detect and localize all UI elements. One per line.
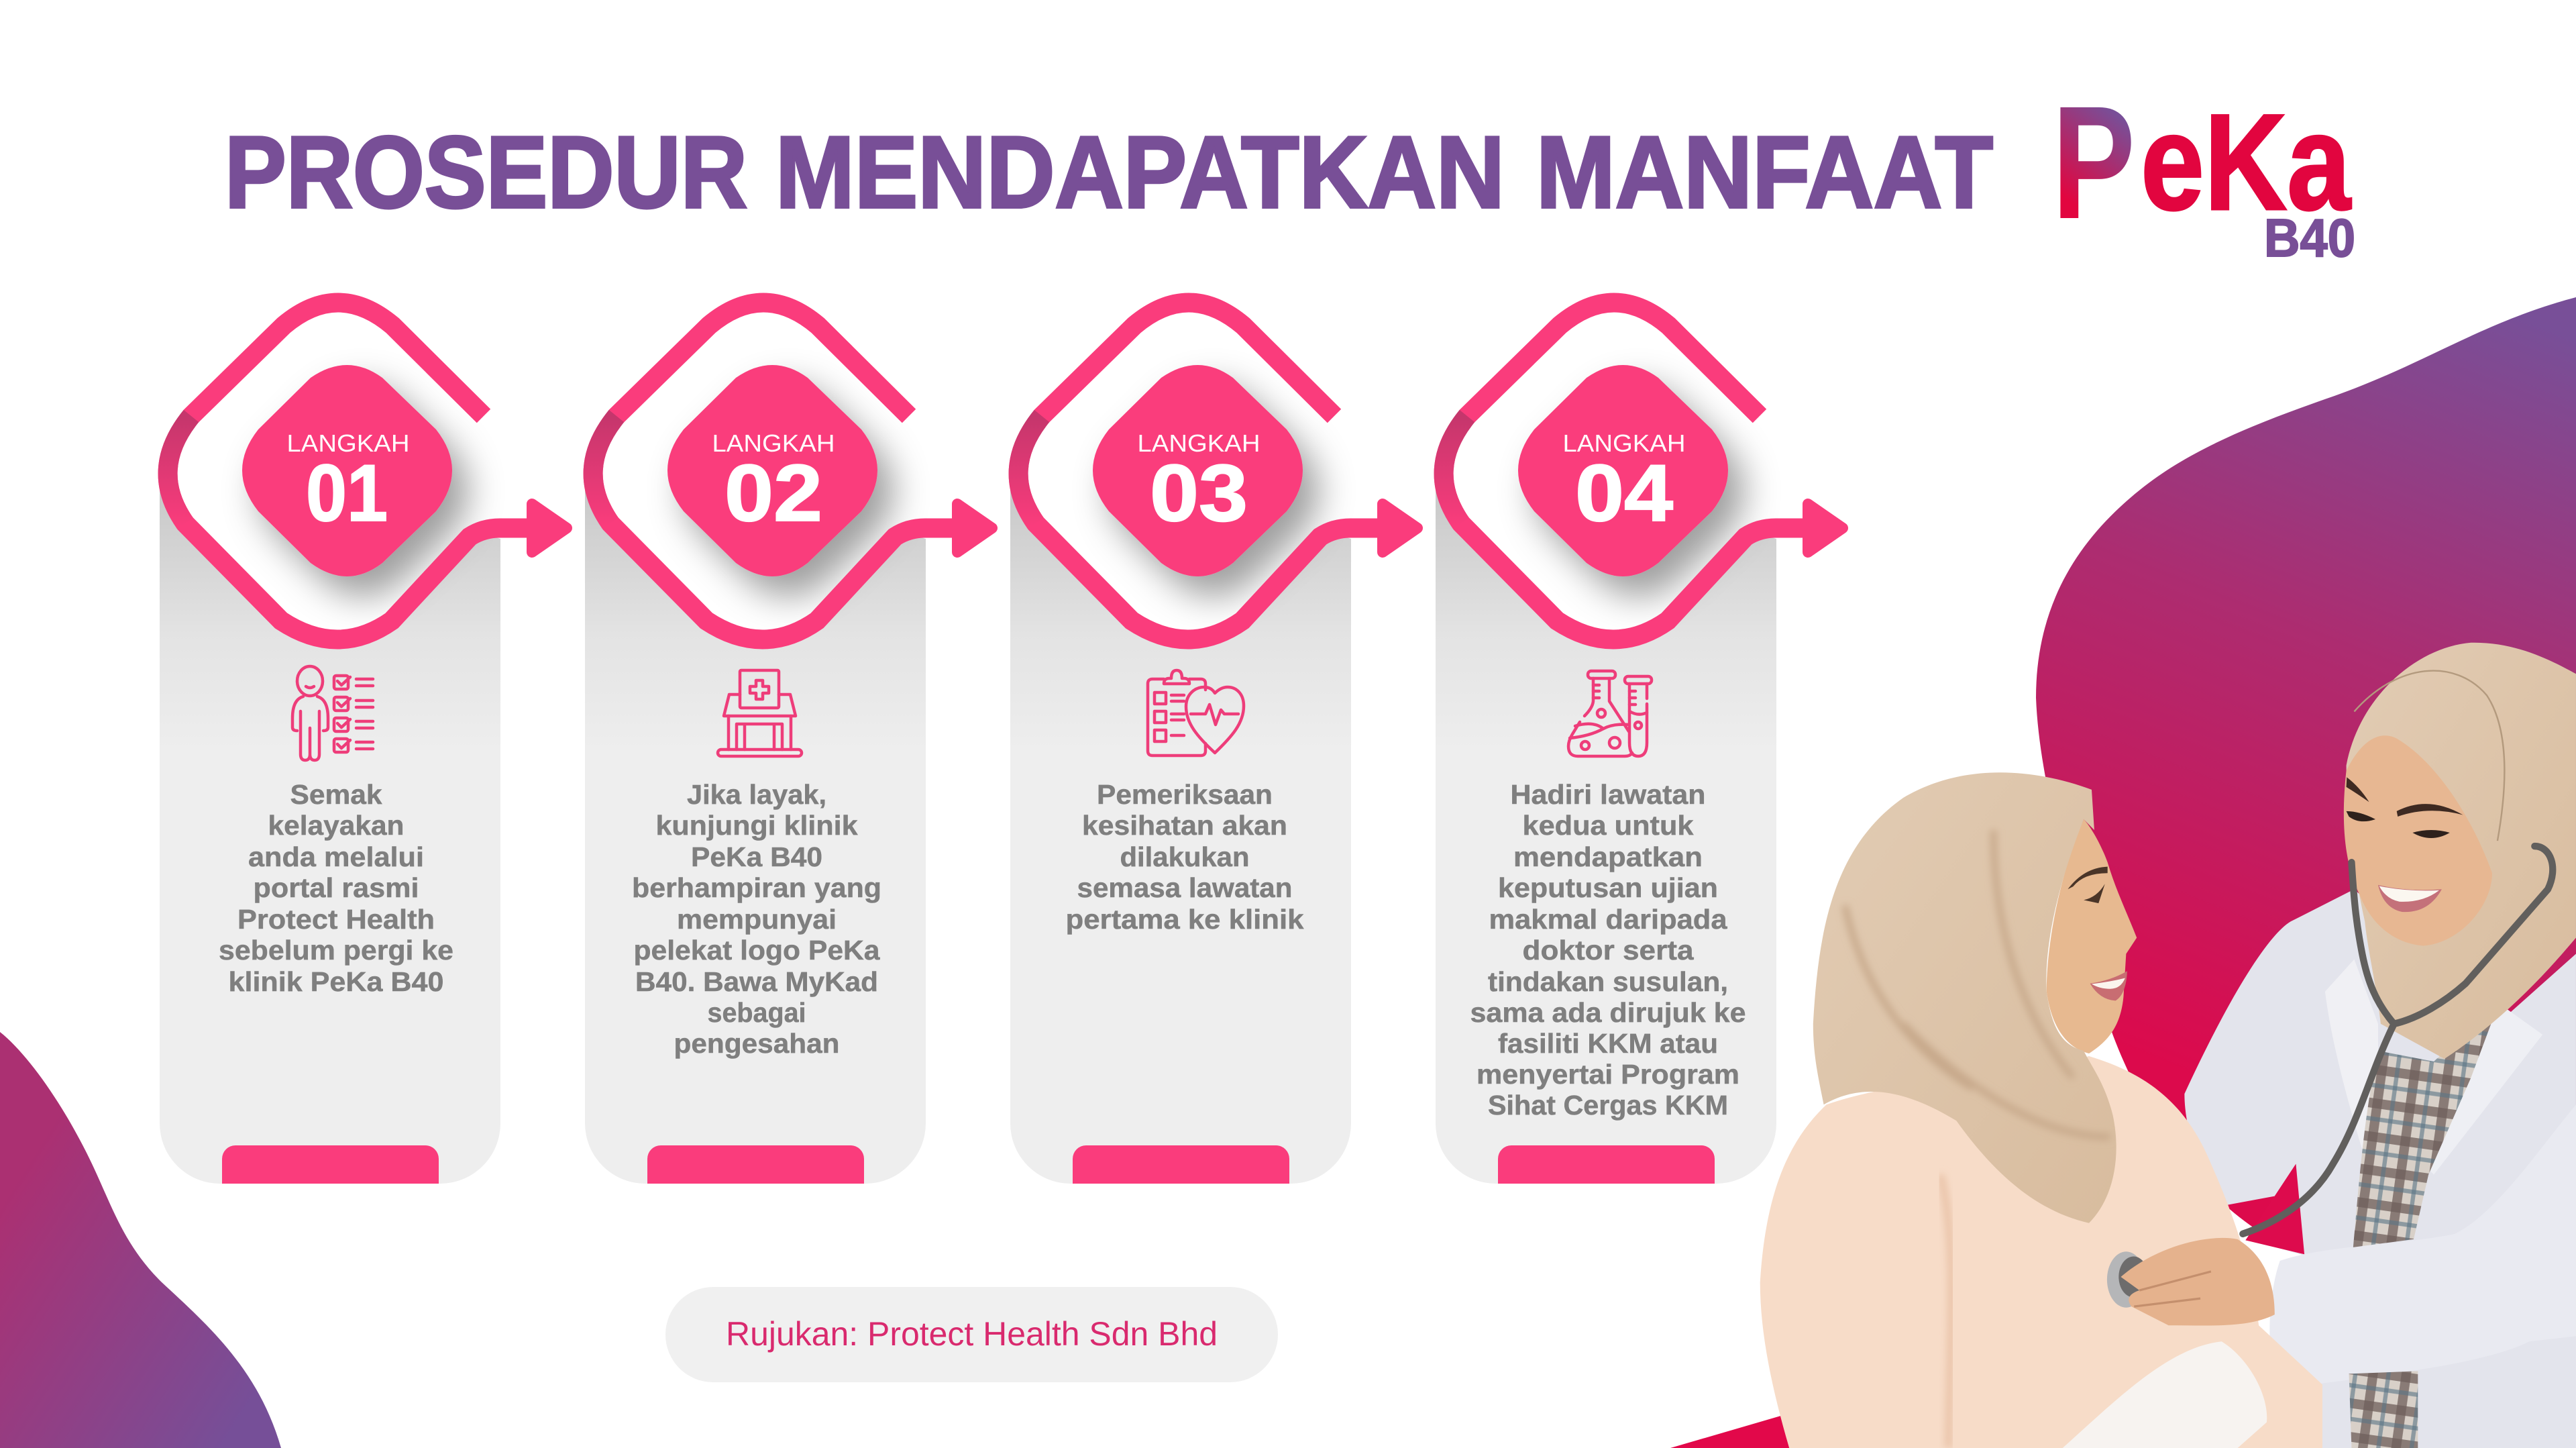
step 04 description: sama ada dirujuk ke [1470,997,1746,1028]
title [225,115,1993,229]
logo: PeKa B40: P [2052,72,2135,252]
step 02 badge label [712,429,835,538]
step 04 description: tindakan susulan, [1488,966,1728,997]
background blob: bottom left [0,1032,281,1448]
step 03 description [1065,779,1304,935]
step 04 badge label: LANGKAH [1563,429,1685,457]
icon: lab flask and test tube [1568,671,1652,756]
logo: PeKa B40: eKa [2141,86,2351,239]
step 03 description: pertama ke klinik [1065,904,1304,935]
photo: doctor and patient illustration [1760,643,2576,1448]
step 01 description: Protect Health [237,904,435,935]
step 01 description [219,779,453,997]
step 04 description: kedua untuk [1523,810,1694,841]
step 02 description: berhampiran yang [632,872,881,903]
step 04 description [1470,779,1746,1121]
step 03 description: dilakukan [1120,841,1249,872]
step 02 description: mempunyai [677,904,837,935]
title: PROSEDUR [225,115,747,229]
step 01 badge label [287,429,409,538]
step 04 badge label [1563,429,1685,538]
step 03 description: kesihatan akan [1082,810,1287,841]
reference pill [665,1287,1278,1382]
step 02 description [632,779,881,1059]
icon: person with checklist [292,666,373,760]
step 02 badge label: LANGKAH [712,429,835,457]
step 04 description: doktor serta [1523,935,1695,966]
icon: clinic building [718,670,802,756]
step 01 badge label: LANGKAH [287,429,409,457]
step 03 description: semasa lawatan [1077,872,1292,903]
patient [1760,772,2322,1448]
step 01 description: sebelum pergi ke [219,935,453,966]
step 02 description: pengesahan [674,1028,840,1059]
step 01 description: kelayakan [268,810,404,841]
panel: step 02 [585,303,992,1184]
step 03 badge label: LANGKAH [1138,429,1260,457]
reference pill: Rujukan: Protect Health Sdn Bhd [726,1315,1218,1353]
step 04 badge label: 04 [1575,448,1673,538]
step 03 badge label: 03 [1150,448,1248,538]
logo: PeKa B40 [2052,72,2355,268]
step 02 description: PeKa B40 [691,841,822,872]
hand with stethoscope [2107,1238,2275,1326]
step 04 description: Hadiri lawatan [1511,779,1705,810]
doctor [2184,643,2576,1448]
icon: clipboard with heart [1148,670,1244,756]
step 01 description: anda melalui [248,841,424,872]
panel: step 04 [1436,303,1843,1184]
step 02 description: Jika layak, [687,779,826,810]
panel: step 03 [1010,303,1417,1184]
step 02 badge label: 02 [724,448,822,538]
step 04 description: mendapatkan [1513,841,1703,872]
background blob: right [2036,297,2576,1275]
title: MENDAPATKAN [775,115,1505,229]
step 02 description: sebagai [707,997,806,1028]
step 04 description: menyertai Program [1477,1059,1739,1090]
step 03 badge label [1138,429,1260,538]
step 02 description: kunjungi klinik [656,810,858,841]
title: MANFAAT [1536,115,1993,229]
step 01 badge label: 01 [306,448,388,538]
step 04 description: fasiliti KKM atau [1498,1028,1718,1059]
panel: step 01 [160,303,567,1184]
step 03 description: Pemeriksaan [1097,779,1273,810]
step 04 description: keputusan ujian [1498,872,1718,903]
background wedge: bottom red [1670,1412,1811,1448]
step 01 description: portal rasmi [254,872,419,903]
step 04 description: Sihat Cergas KKM [1488,1090,1728,1121]
logo: PeKa B40: B40 [2264,208,2355,268]
step 04 description: makmal daripada [1489,904,1728,935]
step 02 description: B40. Bawa MyKad [635,966,878,997]
step 01 description: klinik PeKa B40 [228,966,444,997]
step 02 description: pelekat logo PeKa [633,935,881,966]
step 01 description: Semak [290,779,382,810]
